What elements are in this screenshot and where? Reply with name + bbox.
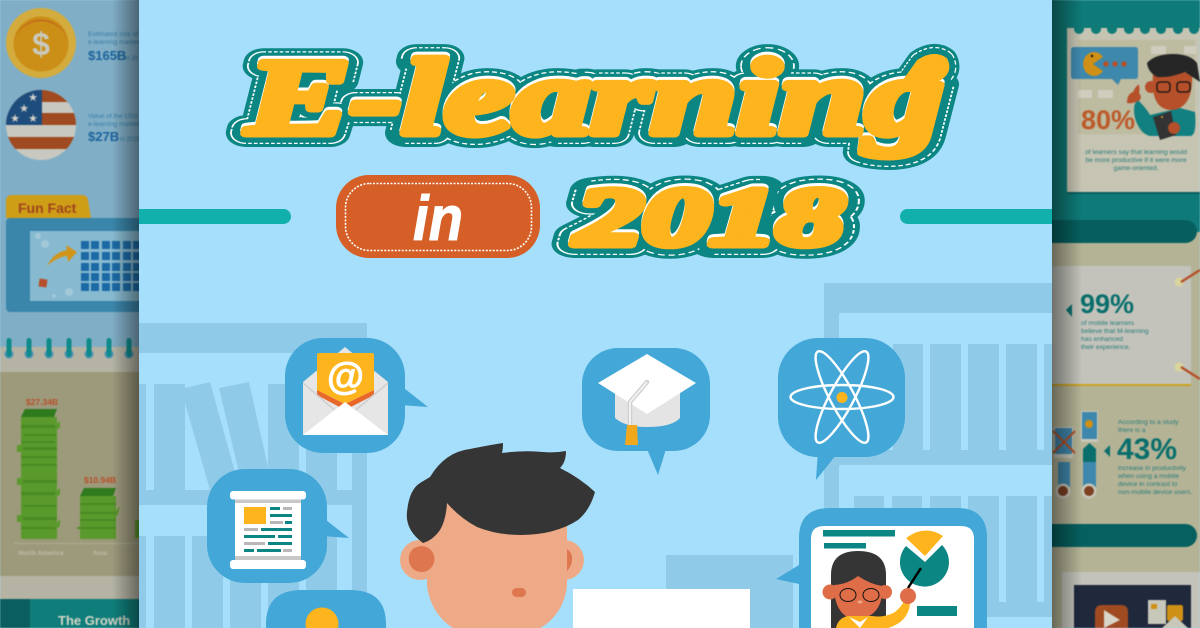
panel: left background infographic [0,0,146,628]
icon: email speech bubble: @ [327,356,364,398]
text: mobile caption: of mobile learners [1081,320,1135,327]
icon: USA flag [6,90,76,160]
panel: fun fact: Fun Fact [18,200,77,216]
decoration: left teal bar [139,209,291,224]
panel: dark section band 2 [1040,524,1197,547]
title: E-learning: E-learning [246,37,943,157]
icon: student head [400,443,595,628]
icon: atom speech bubble [778,338,905,480]
text: mobile caption: their experience. [1081,344,1131,351]
text: market size: in 20 [125,56,139,62]
chart: slide lines and pie [823,530,957,616]
icon: USA flag: ★ [28,92,38,104]
title: E-learning: E-learning [246,34,943,154]
icon: gold coin [6,8,76,78]
title: 2018: 2018 [574,169,844,260]
text: USA market value: in 2016 [120,137,140,143]
icon: USA flag: ★ [10,113,20,125]
panel: dark section band 1 [1040,220,1197,243]
decoration: right teal bar [900,209,1052,224]
title: 2018: 2018 [574,172,844,263]
text: productivity stat [1117,419,1192,496]
panel: white mobile note [1050,266,1200,386]
text: market size: e-learning market [88,39,139,46]
icon: partial bottom speech bubble [266,590,386,628]
icon: graduation cap speech bubble [582,348,710,475]
title: E-learning: E-learning [246,37,943,156]
laptop: white screen [573,589,750,628]
panel: main hero [120,0,1071,628]
shadow: panel edge right [1052,0,1082,628]
background: right bookshelf [666,283,1052,628]
title: E-learning: E-learning [246,37,943,156]
label: in pill: in [413,184,463,254]
text: productivity stat: there is a [1118,427,1146,434]
text: region labels: Asia [93,550,107,557]
icon: USA flag: ★ [28,113,38,125]
panel: growth heading strip [0,599,140,628]
text: game caption: game-oriented. [1114,165,1159,172]
text: game caption: of learners say that learning would [1085,149,1187,156]
text: market size: Estimated size of [88,31,138,38]
text: productivity stat: 43% [1117,433,1177,466]
title: 2018: 2018 [574,172,844,262]
chart: mobile versus non-mobile [1053,411,1110,498]
panel: growth heading strip: The Growth [58,613,130,628]
icon: document speech bubble [207,469,349,583]
text: productivity stat: increase in productivity [1118,465,1187,472]
panel: notebook with money chart [0,338,141,599]
shadow: panel edge left [112,0,139,628]
icon: email speech bubble [285,338,428,453]
panel: game note card [1067,24,1200,194]
text: market size: $165B [88,48,126,63]
text: region labels [18,550,107,557]
title: 2018: 2018 [574,172,844,262]
icon: teacher figure [822,551,921,628]
text: productivity stat: non-mobile device users. [1118,489,1192,496]
panel: right background infographic [1040,0,1200,628]
text: productivity stat: when using a mobile [1117,473,1179,480]
title: 2018: 2018 [574,172,844,262]
chart: North America money stack: $27.34B [26,397,58,407]
text: USA market value: Value of the USA [88,113,139,120]
icon: teacher presentation speech bubble [776,508,987,628]
background: left bookshelf [139,323,367,628]
text: mobile caption [1081,320,1149,351]
stat: 99%: 99% [1080,289,1134,319]
text: region labels: North America [18,550,64,557]
text: mobile caption: has enhanced [1081,336,1123,343]
text: market size [88,31,139,63]
label: in pill [336,175,540,258]
icon: pacman bubble [1071,47,1138,85]
panel: fun fact [6,195,146,312]
text: productivity stat: device in contrast to [1118,481,1178,488]
text: USA market value: e-learning market [88,121,139,128]
title: E-learning: E-learning [246,37,943,156]
text: mobile caption: believe that M-learning [1081,328,1149,335]
icon: gold coin: $ [32,26,50,62]
icon: man with phone [1127,54,1200,140]
text: productivity stat: According to a study [1118,419,1179,426]
stat: 80%: 80% [1081,105,1135,135]
chart: Asia money stack: $10.94B [84,475,116,485]
panel: video note [1062,572,1200,628]
text: game caption [1085,149,1187,172]
text: game caption: be more productive if it were more [1085,157,1187,164]
chart: North America money stack [17,397,60,539]
text: USA market value [88,113,140,144]
icon: USA flag: ★ [19,103,29,115]
chart: Asia money stack [77,475,120,539]
text: USA market value: $27B [88,129,119,144]
